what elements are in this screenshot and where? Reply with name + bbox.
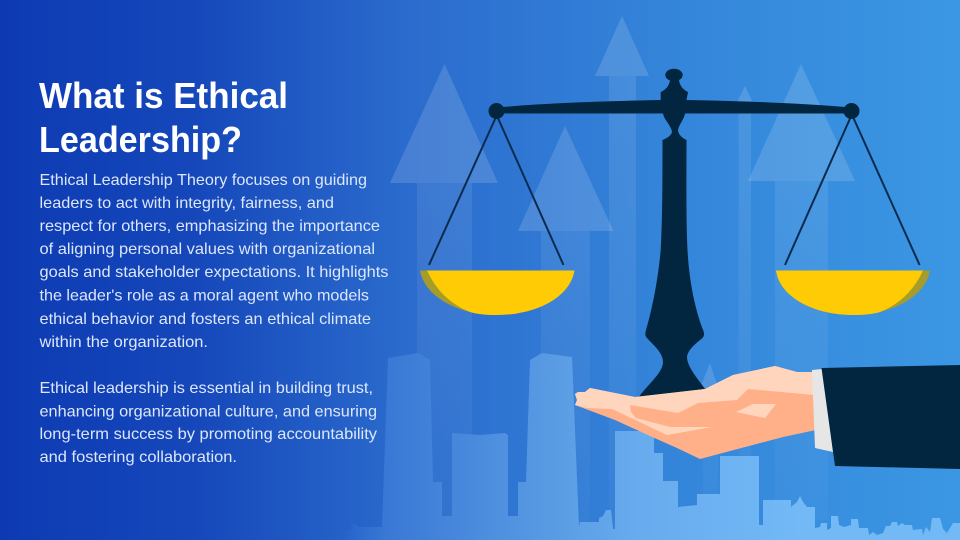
title: What is Ethical (39, 75, 288, 116)
first paragraph (38, 172, 388, 351)
right pan (776, 270, 930, 315)
first paragraph: ethical behavior and fosters an ethical climate (40, 311, 371, 328)
title: Leadership? (39, 119, 242, 160)
scale stand and beam (488, 69, 860, 398)
hand holding the scale (575, 365, 960, 469)
first paragraph: the leader's role as a moral agent who models (40, 288, 369, 304)
first paragraph: of aligning personal values with organizational (40, 241, 375, 258)
second paragraph (40, 380, 377, 466)
first paragraph: leaders to act with integrity, fairness, and (40, 195, 334, 212)
first paragraph: respect for others, emphasizing the importance (40, 218, 380, 235)
text panel (38, 75, 388, 466)
second paragraph: and fostering collaboration. (40, 449, 237, 466)
palm crease highlight (736, 404, 776, 418)
arrow stems (417, 76, 828, 540)
title (39, 75, 288, 160)
hand highlight (575, 366, 814, 435)
left pan (420, 270, 574, 315)
first paragraph: Ethical Leadership Theory focuses on guiding (40, 172, 367, 189)
second paragraph: long-term success by promoting accountability (40, 426, 377, 443)
background rising arrows (390, 16, 855, 540)
balance scale (420, 69, 930, 398)
first paragraph: goals and stakeholder expectations. It highlights (40, 264, 388, 281)
suit sleeve (822, 365, 960, 469)
first paragraph: within the organization. (38, 334, 208, 351)
scale strings (429, 117, 920, 265)
arrow heads (390, 16, 855, 388)
hand base shadow tone (575, 366, 816, 459)
shirt cuff (812, 369, 833, 452)
second paragraph: Ethical leadership is essential in building trust, (40, 380, 373, 397)
second paragraph: enhancing organizational culture, and ensuring (40, 404, 377, 420)
city skyline (340, 353, 960, 540)
